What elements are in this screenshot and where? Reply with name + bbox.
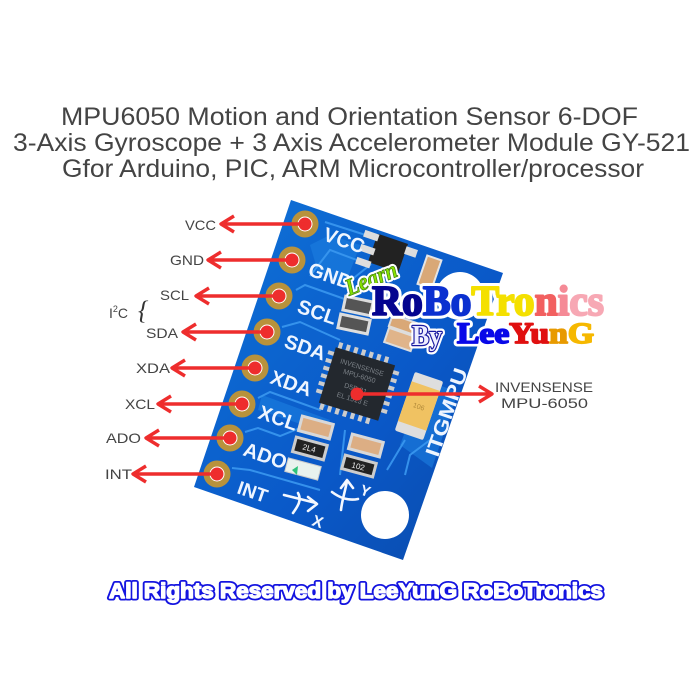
IC chip MPU-6050 [311, 340, 403, 428]
I2C bracket label: 2 [113, 304, 118, 314]
pin labels: INT [105, 466, 133, 482]
arrow: chip to INVENSENSE [350, 386, 492, 402]
LeeYunG: LeeYunG [457, 317, 594, 350]
board silkscreen labels: ADO [240, 439, 290, 474]
IC chip MPU-6050: INVENSENSE [339, 358, 385, 378]
lower capacitors and resistors: 2L4 [302, 442, 317, 455]
tantalum capacitor [395, 372, 443, 440]
Learn: Learn [341, 257, 401, 302]
footer copyright: All Rights Reserved by LeeYunG RoBoTronics [109, 580, 603, 603]
RoBoTronics: RoBoTronics [372, 279, 604, 325]
resistors upper [338, 296, 373, 334]
arrow: GND [208, 252, 298, 268]
capacitor upper [417, 256, 441, 289]
arrow: VCC [221, 216, 312, 232]
board silkscreen labels: Y [358, 482, 373, 501]
arrow: INT [133, 466, 224, 482]
arrow: ADO [146, 430, 236, 446]
pin labels: SCL [160, 287, 189, 303]
logo: Learn RoBoTronics By LeeYunG [341, 257, 604, 352]
chip label: INVENSENSE [495, 379, 593, 395]
footer copyright: All Rights Reserved by LeeYunG RoBoTronics [109, 580, 603, 603]
chip label: MPU-6050 [501, 395, 588, 411]
Learn: Learn [341, 257, 401, 302]
ground pours [258, 235, 458, 468]
lower capacitors and resistors: 102 [351, 460, 366, 473]
pin labels: VCC [185, 217, 216, 233]
regulator [355, 230, 418, 272]
RoBoTronics: RoBoTronics [372, 279, 604, 325]
capacitors mid [384, 315, 419, 351]
arrow: XDA [172, 360, 262, 376]
board silkscreen labels [234, 224, 473, 532]
board body [194, 200, 503, 560]
LED [285, 458, 321, 480]
lower capacitors and resistors [292, 416, 383, 477]
IC chip MPU-6050: MPU-6050 [342, 369, 376, 385]
arrow: SDA [183, 324, 274, 340]
board silkscreen labels: GND [305, 259, 355, 294]
pin labels: GND [170, 252, 204, 268]
I2C bracket label: { [138, 296, 149, 325]
title: 3-Axis Gyroscope + 3 Axis Accelerometer Module GY-521 [13, 129, 690, 157]
By: By [412, 321, 442, 352]
board silkscreen labels: VCC [320, 224, 367, 258]
arrow: SCL [196, 288, 286, 304]
By: By [412, 321, 442, 352]
title: Gfor Arduino, PIC, ARM Microcontroller/processor [62, 155, 644, 183]
board silkscreen labels: XCL [255, 402, 300, 436]
board silkscreen labels: INT [234, 478, 271, 508]
board silkscreen labels: SCL [294, 296, 339, 330]
header pads [206, 214, 316, 484]
LeeYunG: LeeYunG [457, 317, 594, 350]
copper traces [232, 222, 430, 490]
IC chip MPU-6050: EL 1513 E [336, 392, 369, 408]
I2C bracket label [109, 296, 149, 325]
I2C bracket label: C [118, 305, 128, 321]
pin labels: ADO [106, 430, 141, 446]
upper mounting hole [436, 272, 484, 320]
chip label [495, 379, 593, 411]
pin labels: XCL [125, 396, 155, 412]
board silkscreen labels: ITGMPU [422, 365, 473, 460]
pin labels [105, 217, 216, 482]
lower mounting hole [361, 491, 409, 539]
board silkscreen labels: X [310, 513, 326, 532]
tantalum capacitor: 106 [412, 402, 425, 413]
IC chip MPU-6050: D5B 81 [343, 382, 368, 396]
title [13, 103, 690, 183]
I2C bracket label: I [109, 305, 113, 321]
board silkscreen labels: SDA [281, 331, 328, 365]
arrow: XCL [158, 396, 248, 412]
pin labels: SDA [146, 325, 179, 341]
title: MPU6050 Motion and Orientation Sensor 6-DOF [61, 103, 638, 131]
board silkscreen labels: XDA [267, 367, 314, 401]
axis icons [284, 480, 358, 513]
pin labels: XDA [136, 360, 171, 376]
sensor board [194, 200, 503, 560]
